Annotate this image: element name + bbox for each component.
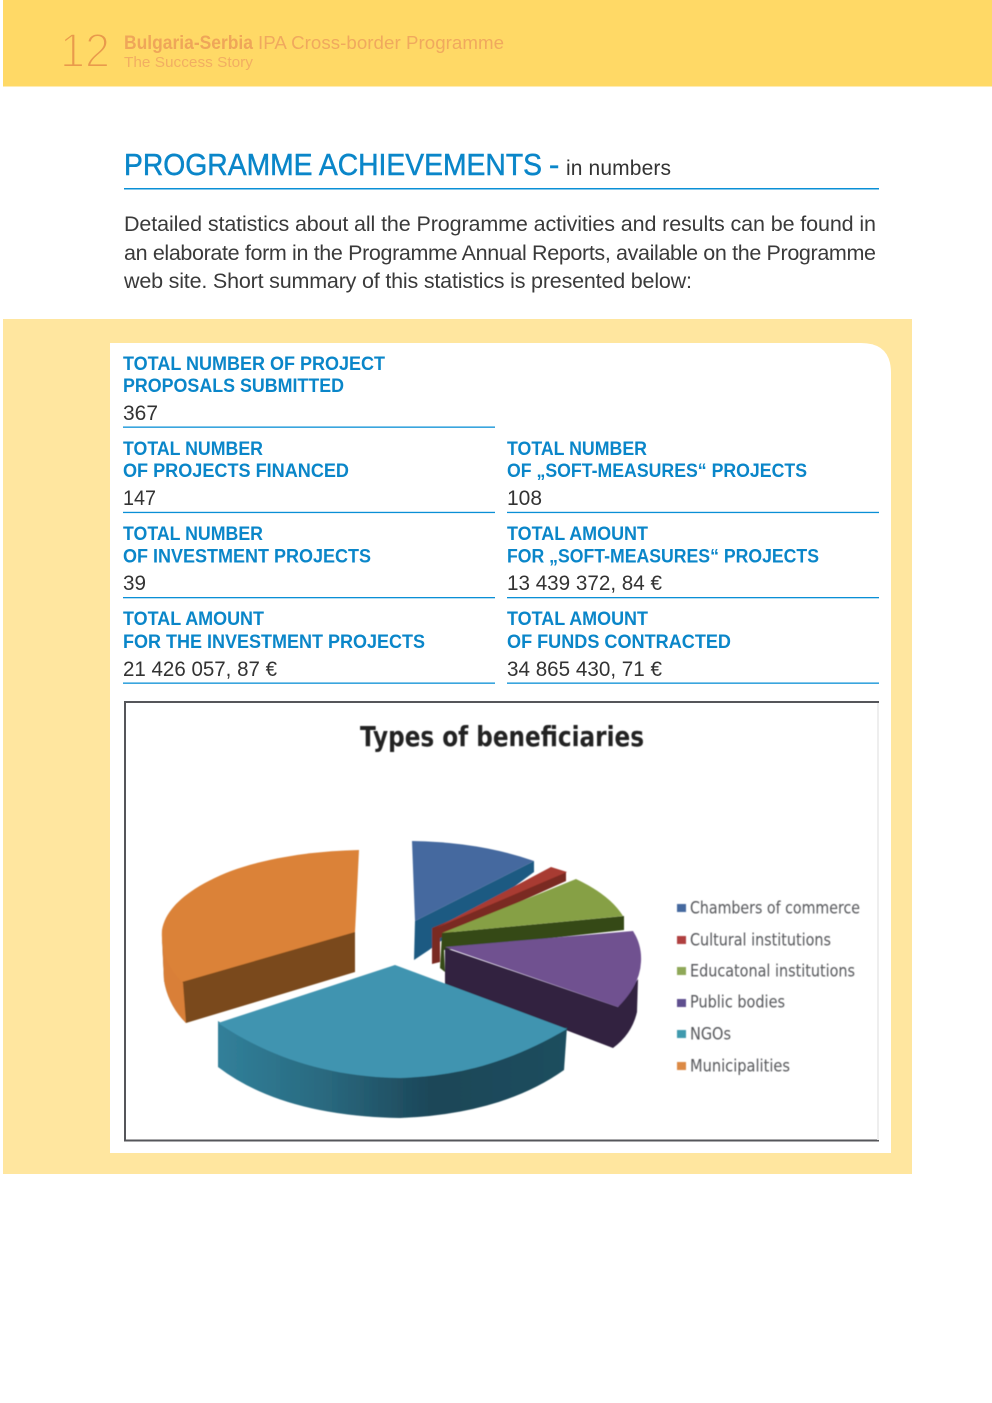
intro paragraph: web site. Short summary of this statistics is presented below: <box>123 269 692 293</box>
subtitle: The Success Story <box>124 54 254 71</box>
stat: soft-measures projects <box>507 439 879 513</box>
stat: soft-measures amount: 13 439 372, 84 € <box>507 572 662 595</box>
pie chart <box>162 841 641 1118</box>
stat: projects financed: OF PROJECTS FINANCED <box>123 461 349 482</box>
intro paragraph <box>123 212 876 293</box>
stat: investment projects <box>123 524 495 598</box>
chart frame <box>125 702 879 1140</box>
legend: Educatonal institutions <box>690 962 855 980</box>
stat: projects financed <box>123 439 495 513</box>
pie slice: cultural institutions <box>432 867 567 964</box>
legend: Municipalities <box>690 1056 790 1076</box>
stat: proposals submitted <box>123 354 495 428</box>
stat: proposals submitted: TOTAL NUMBER OF PROJECT <box>123 354 385 375</box>
intro paragraph: an elaborate form in the Programme Annual Reports, available on the Programme <box>124 241 876 265</box>
section heading: - <box>549 147 559 182</box>
stat: investment amount <box>123 609 495 684</box>
stat: soft-measures amount <box>507 524 879 598</box>
pie slice: public bodies <box>445 931 641 1048</box>
stat: soft-measures projects: TOTAL NUMBER <box>507 439 647 460</box>
stat: funds contracted: 34 865 430, 71 € <box>507 658 662 681</box>
header band <box>3 0 992 86</box>
stat: proposals submitted: 367 <box>123 402 158 425</box>
chart: types of beneficiaries <box>125 702 879 1140</box>
pie slice: educational institutions <box>440 879 624 972</box>
stat: investment projects: TOTAL NUMBER <box>123 524 263 545</box>
stat: projects financed: 147 <box>123 487 156 510</box>
legend: Cultural institutions <box>690 930 831 950</box>
programme name: IPA Cross-border Programme <box>258 32 504 53</box>
stat: investment amount: FOR THE INVESTMENT PROJECTS <box>123 632 425 653</box>
programme name: Bulgaria-Serbia <box>124 32 253 54</box>
stat: soft-measures amount: TOTAL AMOUNT <box>507 524 648 545</box>
stat: investment amount: TOTAL AMOUNT <box>123 609 264 630</box>
section heading: in numbers <box>566 157 671 180</box>
stat: funds contracted: OF FUNDS CONTRACTED <box>507 632 731 653</box>
pie slice: chambers of commerce <box>412 841 534 960</box>
intro paragraph: Detailed statistics about all the Programme activities and results can be found in <box>124 212 876 236</box>
pie slice: NGOs <box>218 965 567 1118</box>
stat: projects financed: TOTAL NUMBER <box>123 439 263 460</box>
stat: investment amount: 21 426 057, 87 € <box>123 658 277 681</box>
stat: soft-measures projects: 108 <box>507 487 542 510</box>
legend <box>677 898 860 1076</box>
page number: 12 <box>60 25 110 78</box>
white card <box>110 343 891 1153</box>
stat: soft-measures amount: FOR „SOFT-MEASURES“ PROJECTS <box>507 546 819 568</box>
stat: investment projects: OF INVESTMENT PROJECTS <box>123 546 371 568</box>
pie slice: municipalities <box>162 850 359 1023</box>
programme name <box>124 32 504 54</box>
stat: soft-measures projects: OF „SOFT-MEASURES“ PROJECTS <box>507 461 807 482</box>
section heading: PROGRAMME ACHIEVEMENTS <box>124 147 542 182</box>
stat: proposals submitted: PROPOSALS SUBMITTED <box>123 376 344 397</box>
stat: funds contracted: TOTAL AMOUNT <box>507 609 648 630</box>
legend: Chambers of commerce <box>690 898 860 918</box>
legend: Public bodies <box>690 992 785 1012</box>
chart title: Types of beneficiaries <box>360 720 644 753</box>
stat: funds contracted <box>507 609 879 684</box>
yellow panel <box>3 319 912 1174</box>
legend: NGOs <box>690 1024 731 1044</box>
stat: investment projects: 39 <box>123 572 146 595</box>
section heading <box>124 147 879 190</box>
